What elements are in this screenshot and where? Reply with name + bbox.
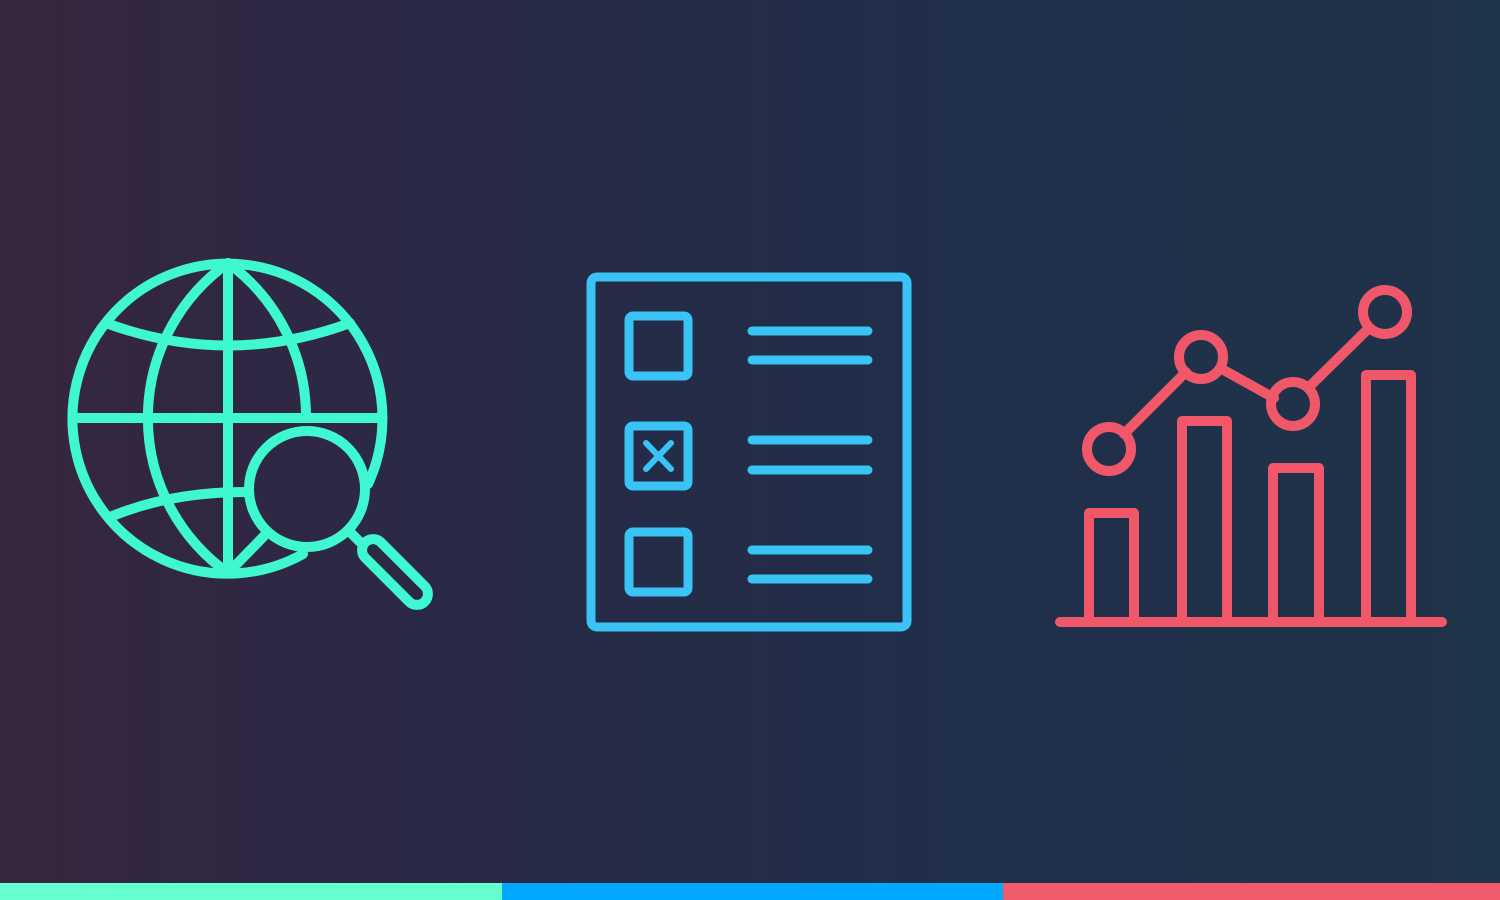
icon: bar and line chart [1060, 290, 1442, 622]
bottom color bar [0, 883, 1500, 900]
icon: checklist [591, 277, 907, 627]
icon: globe with magnifier [72, 263, 432, 609]
